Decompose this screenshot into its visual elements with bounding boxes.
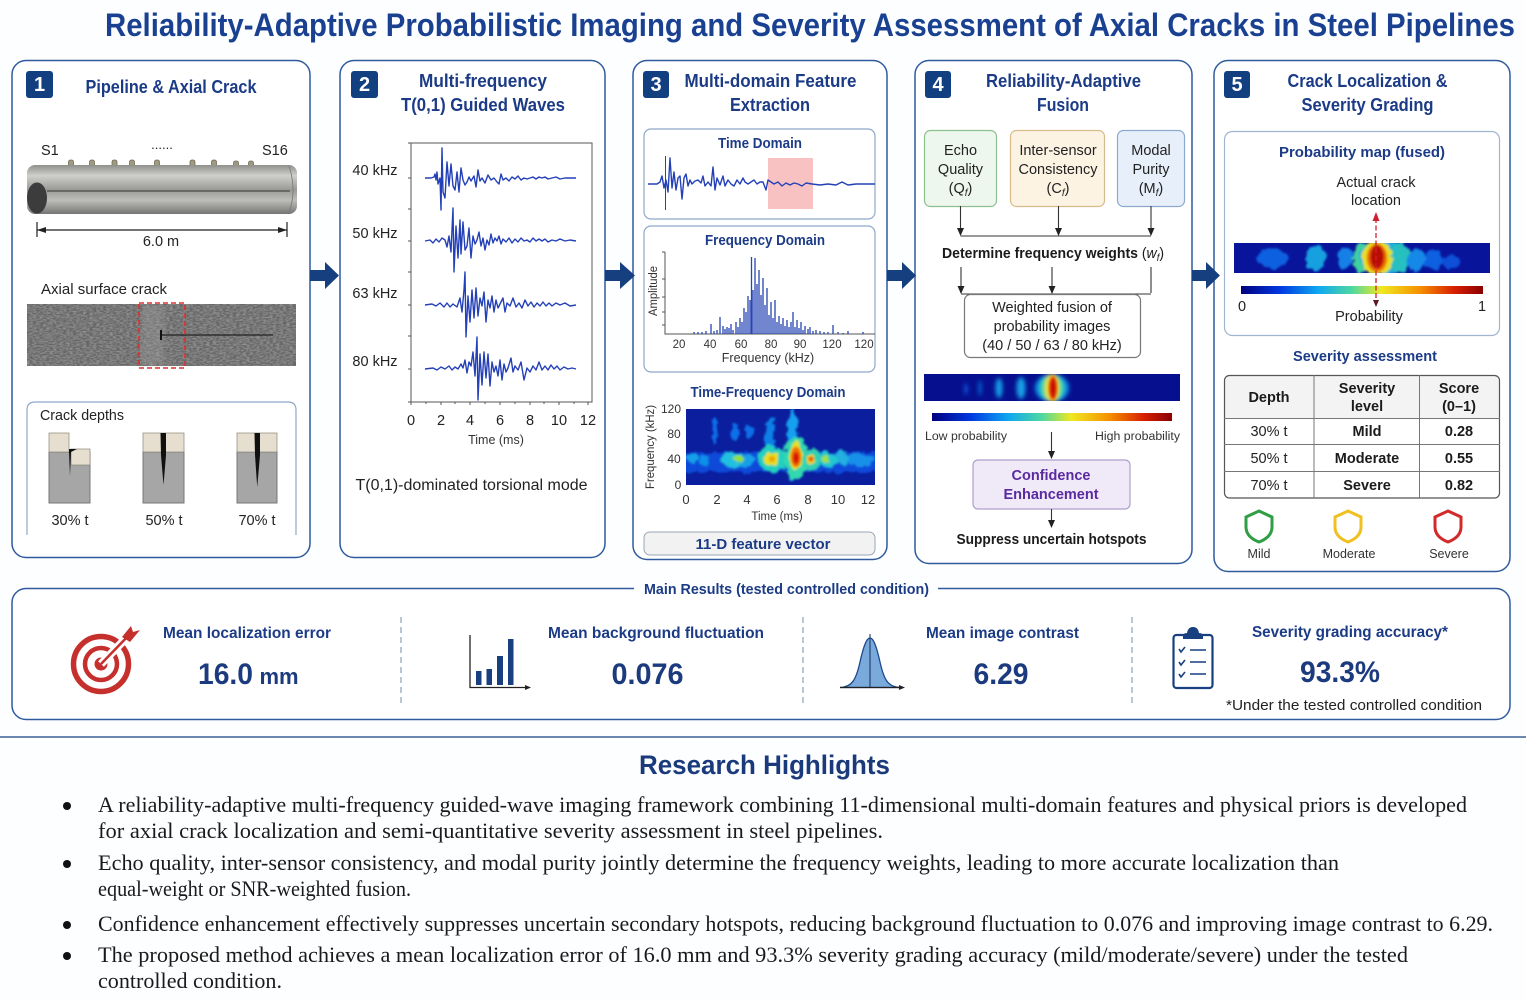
badge 5 — [1224, 71, 1250, 98]
time-frequency domain: 6 — [773, 492, 781, 507]
icon: severe shield — [1429, 511, 1469, 561]
box: probability map: 1 — [1478, 299, 1486, 315]
table: severity: level — [1351, 399, 1383, 415]
box: modal purity — [1118, 130, 1184, 206]
box: probability map: Actual crack — [1337, 175, 1416, 191]
box: probability map: Probability — [1335, 309, 1404, 325]
table: severity: Moderate — [1335, 451, 1399, 467]
heading 3: Extraction — [730, 95, 810, 115]
metric: image contrast: 6.29 — [974, 658, 1028, 691]
box: inter-sensor consistency — [1010, 130, 1104, 206]
panel 5: crack localization and severity grading — [1214, 60, 1510, 572]
bullet 2 — [63, 850, 1339, 901]
metric: localization error: Mean localization error — [163, 625, 331, 642]
heatmap: fused probability — [924, 374, 1180, 402]
chart: waveforms at four frequencies: 40 kHz — [352, 163, 398, 179]
metric: image contrast — [926, 625, 1079, 691]
table: severity — [1224, 375, 1500, 498]
metric: background fluctuation: 0.076 — [612, 658, 684, 691]
wave 40 kHz — [425, 148, 576, 210]
heading: research highlights: Research Highlights — [639, 750, 890, 780]
metric: localization error: 16.0 — [198, 658, 253, 691]
box: confidence enhancement: Confidence — [1012, 468, 1090, 484]
icon: bar chart — [470, 635, 531, 690]
colorbar: low to high probability — [925, 413, 1180, 443]
time-frequency domain: 2 — [713, 492, 721, 507]
heading 1: Pipeline & Axial Crack — [86, 77, 257, 97]
metric: localization error — [163, 625, 331, 691]
box: weighted fusion: (40 / 50 / 63 / 80 kHz) — [982, 338, 1122, 354]
time-frequency domain: 12 — [861, 492, 875, 507]
box: echo quality: ) — [968, 181, 972, 197]
dimension: 6.0 m — [37, 222, 287, 250]
bullet 4 — [63, 942, 1408, 993]
time-frequency domain: 0 — [675, 478, 682, 492]
feature vector box: 11-D feature vector — [696, 536, 831, 553]
badge 2 — [351, 71, 378, 98]
panel 4: reliability-adaptive fusion — [915, 60, 1192, 564]
heading 2: Multi-frequency — [419, 71, 547, 91]
time-frequency domain: Time-Frequency Domain — [690, 385, 846, 401]
table: severity: (0–1) — [1442, 399, 1476, 415]
icon: target — [74, 626, 140, 692]
arrow 1 to 2 — [310, 262, 339, 289]
box: crack depths — [27, 402, 296, 535]
caption: torsional mode: T(0,1)-dominated torsional mode — [356, 477, 588, 494]
bullet 2: Echo quality, inter-sensor consistency, and modal purity jointly determine the frequency weights, leading to more accurate localization than — [98, 850, 1339, 875]
bullet 4: The proposed method achieves a mean localization error of 16.0 mm and 93.3% severity grading accuracy (mild/moderate/severe) under the tested — [98, 942, 1408, 967]
box: time domain — [644, 129, 875, 219]
box: echo quality: f — [965, 188, 969, 199]
heading 3 — [684, 71, 856, 115]
box: inter-sensor consistency: Consistency — [1019, 162, 1098, 178]
heading: severity assessment: Severity assessment — [1293, 348, 1437, 365]
arrow to suppress — [1048, 509, 1055, 528]
box: modal purity: ) — [1158, 181, 1163, 197]
crack location marker — [1372, 212, 1380, 307]
badge 2: 2 — [359, 74, 370, 96]
box: modal purity: (M — [1139, 181, 1156, 197]
box: probability map — [1224, 132, 1500, 336]
box: inter-sensor consistency: ) — [1065, 181, 1069, 197]
box: frequency domain: 120 — [854, 339, 874, 351]
arrow 4 to 5 — [1192, 262, 1220, 289]
chart: waveforms at four frequencies: 4 — [466, 413, 474, 429]
box: weighted fusion: probability images — [994, 319, 1110, 335]
badge 3: 3 — [650, 74, 662, 96]
specimen 30% t — [49, 433, 90, 529]
box: frequency domain: 80 — [765, 339, 777, 351]
heading: main results: Main Results (tested controlled condition) — [644, 581, 929, 598]
metric: severity accuracy: *Under the tested controlled condition — [1226, 697, 1482, 714]
bullet 1: A reliability-adaptive multi-frequency guided-wave imaging framework combining 11-dimensional multi-domain features and physical priors is developed — [98, 792, 1467, 817]
box: inter-sensor consistency: f — [1062, 188, 1066, 199]
bullet 1: for axial crack localization and semi-quantitative severity assessment in steel pipelines. — [98, 818, 883, 843]
table: severity: 50% t — [1250, 451, 1288, 467]
box: confidence enhancement — [973, 460, 1130, 509]
specimen 50% t — [143, 433, 184, 529]
chart: waveforms at four frequencies: 50 kHz — [352, 226, 398, 242]
box: echo quality: Quality — [938, 162, 984, 178]
box: echo quality — [924, 130, 996, 206]
metric: severity accuracy: Severity grading accuracy* — [1252, 624, 1449, 641]
specimen 30% t: 30% t — [51, 513, 89, 529]
chart: waveforms at four frequencies: Time (ms) — [468, 433, 524, 447]
time-frequency domain: 40 — [667, 452, 681, 466]
heading 5: Severity Grading — [1302, 95, 1434, 115]
time-frequency domain: 0 — [682, 492, 690, 507]
metric: image contrast: Mean image contrast — [926, 625, 1079, 642]
table: severity: Score — [1439, 381, 1479, 397]
icon: gaussian curve — [840, 634, 905, 690]
sensor labels: S1 — [41, 143, 59, 159]
spectrogram — [680, 409, 880, 485]
box: crack depths: Crack depths — [40, 408, 124, 424]
box: echo quality: (Q — [949, 181, 965, 197]
box: inter-sensor consistency: Inter-sensor — [1019, 143, 1097, 159]
bullet 4: controlled condition. — [98, 968, 282, 993]
panel 1: pipeline and axial crack — [12, 60, 310, 558]
icon: severe shield: Severe — [1429, 547, 1469, 561]
box: frequency domain: 60 — [735, 339, 747, 351]
table: severity: Mild — [1352, 424, 1382, 440]
box: weighted fusion — [964, 294, 1140, 358]
icon: clipboard checklist — [1174, 627, 1212, 688]
metric: localization error: mm — [259, 664, 299, 689]
photo: crack surface — [27, 303, 296, 368]
dimension: 6.0 m: 6.0 m — [143, 234, 179, 250]
table: severity: 30% t — [1250, 424, 1288, 440]
icon: mild shield: Mild — [1248, 547, 1271, 561]
arrow to confidence — [1048, 432, 1055, 459]
box: inter-sensor consistency: (C — [1047, 181, 1062, 197]
box: probability map: 0 — [1238, 299, 1246, 315]
text: determine frequency weights: ) — [1159, 245, 1164, 262]
time-frequency domain: 10 — [831, 492, 845, 507]
badge 1: 1 — [34, 74, 45, 96]
spectrum bars — [694, 257, 863, 334]
heading 4 — [986, 71, 1141, 115]
metric: severity accuracy — [1226, 624, 1482, 714]
metric: background fluctuation: Mean background fluctuation — [548, 625, 764, 642]
heading 3: Multi-domain Feature — [684, 71, 856, 91]
metric: severity accuracy: 93.3% — [1300, 656, 1380, 689]
arrow 2 to 3 — [605, 262, 635, 289]
time-frequency domain: 120 — [661, 402, 681, 416]
chart: waveforms at four frequencies: 10 — [551, 413, 567, 429]
divider — [0, 736, 1526, 738]
chart: waveforms at four frequencies — [352, 143, 596, 447]
table: severity: 70% t — [1250, 478, 1288, 494]
time-frequency domain — [643, 385, 880, 523]
table: severity: Severe — [1343, 478, 1391, 494]
chart: waveforms at four frequencies: 63 kHz — [352, 286, 398, 302]
specimen 70% t: 70% t — [238, 513, 276, 529]
colorbar: low to high probability: Low probability — [925, 431, 1007, 443]
sensor labels: S16 — [262, 143, 288, 159]
box: frequency domain: 120 — [822, 339, 842, 351]
specimen 70% t — [237, 433, 277, 529]
box: frequency domain: Frequency (kHz) — [722, 351, 814, 365]
illustration: pipe with sensors — [27, 160, 297, 214]
table: severity: 0.28 — [1445, 424, 1473, 440]
box: frequency domain: Amplitude — [648, 266, 660, 316]
chart: waveforms at four frequencies: 2 — [437, 413, 445, 429]
wave 80 kHz — [425, 337, 576, 400]
table: severity: 0.55 — [1445, 451, 1473, 467]
panel: main results — [12, 581, 1510, 720]
badge 5: 5 — [1231, 74, 1243, 96]
feature vector box — [644, 532, 875, 555]
icon: mild shield — [1246, 511, 1272, 561]
colorbar: probability — [1241, 286, 1483, 294]
box: frequency domain: 40 — [704, 339, 716, 351]
box: frequency domain: Frequency Domain — [705, 233, 825, 249]
heading 2: T(0,1) Guided Waves — [401, 95, 565, 115]
badge 4: 4 — [932, 74, 944, 96]
arrow 3 to 4 — [887, 262, 916, 289]
heading 5 — [1288, 71, 1448, 115]
arrows: weights to fusion — [958, 267, 1151, 294]
heading 5: Crack Localization & — [1288, 71, 1448, 91]
colorbar: low to high probability: High probability — [1095, 431, 1180, 443]
bullet 3: Confidence enhancement effectively suppresses uncertain secondary hotspots, reducing background fluctuation to 0.076 and improving image contrast to 6.29. — [98, 911, 1493, 936]
panel 2: multi-frequency guided waves — [340, 60, 605, 558]
table: severity: 0.82 — [1445, 478, 1473, 494]
chart: waveforms at four frequencies: 0 — [407, 413, 415, 429]
icon: moderate shield — [1323, 511, 1375, 561]
metric: background fluctuation — [548, 625, 764, 691]
box: modal purity: Modal — [1131, 143, 1171, 159]
table: severity: Depth — [1248, 390, 1290, 406]
box: time domain: Time Domain — [718, 136, 802, 152]
badge 4 — [925, 71, 951, 98]
bullet 2: equal-weight or SNR-weighted fusion. — [98, 876, 411, 901]
table: severity: Severity — [1339, 381, 1395, 397]
time-frequency domain: 4 — [743, 492, 751, 507]
heading 4: Reliability-Adaptive — [986, 71, 1141, 91]
box: confidence enhancement: Enhancement — [1003, 487, 1099, 503]
heatmap: fused map — [1234, 243, 1490, 273]
time-frequency domain: Frequency (kHz) — [643, 405, 657, 489]
time-frequency domain: 8 — [804, 492, 812, 507]
text: determine frequency weights: f — [1157, 253, 1160, 264]
text: determine frequency weights: Determine frequency weights (w — [942, 245, 1157, 262]
icon: moderate shield: Moderate — [1323, 547, 1375, 561]
box: weighted fusion: Weighted fusion of — [992, 300, 1113, 316]
box: probability map: location — [1351, 193, 1401, 209]
time-frequency domain: 80 — [667, 427, 681, 441]
chart: waveforms at four frequencies: 80 kHz — [352, 354, 398, 370]
sensor labels — [41, 137, 288, 159]
chart: waveforms at four frequencies: 8 — [526, 413, 534, 429]
badge 3 — [643, 71, 669, 98]
wave 63 kHz — [425, 272, 576, 337]
bullet 1 — [63, 792, 1467, 843]
box: modal purity: Purity — [1132, 162, 1170, 178]
box: frequency domain: 90 — [794, 339, 806, 351]
box: probability map: Probability map (fused) — [1279, 144, 1445, 161]
text: suppress uncertain hotspots: Suppress uncertain hotspots — [956, 531, 1146, 548]
heading 4: Fusion — [1037, 95, 1089, 115]
arrows: metrics to weights — [957, 206, 1154, 236]
chart: waveforms at four frequencies: 12 — [580, 413, 596, 429]
chart: waveforms at four frequencies: 6 — [496, 413, 504, 429]
box: frequency domain: 20 — [673, 339, 685, 351]
box: frequency domain — [644, 226, 875, 372]
bullets: research highlights — [63, 792, 1493, 993]
sensor labels: ...... — [151, 137, 173, 152]
heading 2 — [401, 71, 565, 115]
badge 1 — [26, 71, 53, 98]
box: modal purity: f — [1156, 188, 1160, 199]
time-frequency domain: Time (ms) — [751, 511, 803, 523]
specimen 50% t: 50% t — [145, 513, 183, 529]
panel 3: multi-domain feature extraction — [633, 60, 887, 560]
box: echo quality: Echo — [944, 143, 977, 159]
label: axial surface crack: Axial surface crack — [41, 282, 168, 298]
wave 50 kHz — [425, 208, 576, 272]
